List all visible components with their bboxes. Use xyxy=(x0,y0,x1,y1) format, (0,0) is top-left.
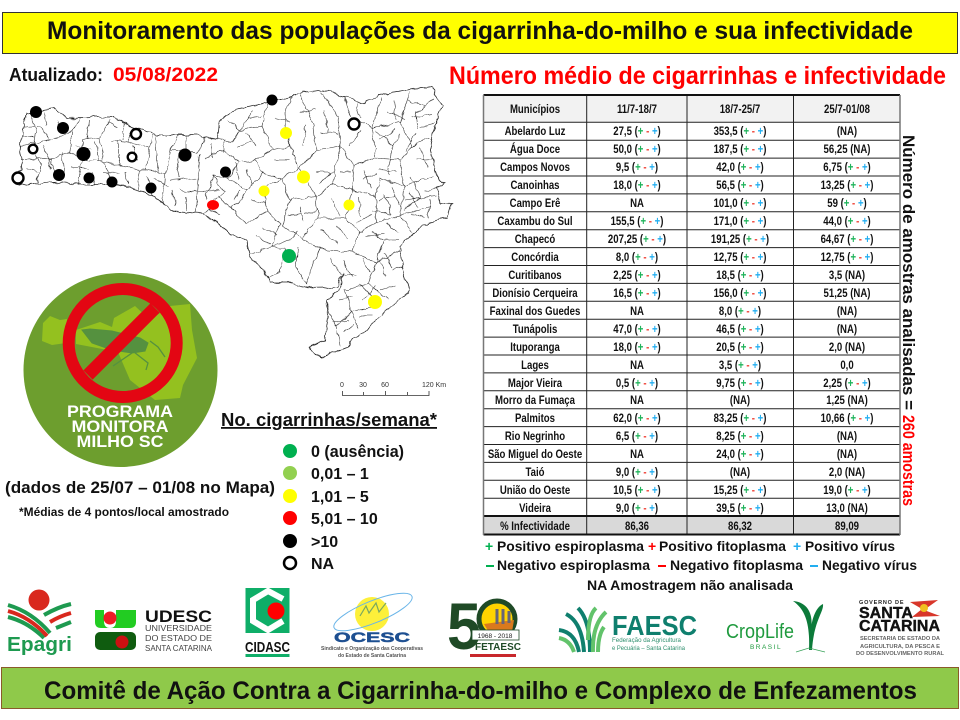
map legend: >10 xyxy=(311,534,338,551)
row xyxy=(500,161,871,174)
row: Campo Erê xyxy=(510,197,560,210)
row xyxy=(510,142,871,156)
row: (NA) xyxy=(837,448,857,461)
row: NA xyxy=(630,197,644,210)
logo: Programa Monitora Milho SC: MONITORA xyxy=(72,418,169,436)
row: NA xyxy=(630,448,644,461)
row: 2,0 (NA) xyxy=(829,341,865,354)
row: 13,25 (+ - +) xyxy=(821,179,874,192)
table symbol legend xyxy=(485,538,917,593)
logo: FETAESC: 1968 - 2018 xyxy=(478,633,513,640)
logo: CIDASC xyxy=(245,588,290,657)
table symbol legend: Negativo vírus xyxy=(822,557,917,573)
logo: CIDASC: CIDASC xyxy=(245,639,290,656)
row: 9,0 (+ - +) xyxy=(616,466,658,479)
logo: Governo de Santa Catarina: CATARINA xyxy=(859,618,940,635)
row: NA xyxy=(630,359,644,372)
row: 24,0 (+ - +) xyxy=(716,448,764,461)
row: 8,0 (+ - +) xyxy=(719,305,761,318)
row xyxy=(515,233,874,246)
row xyxy=(505,125,857,138)
vertical sample count label: Número de amostras analisadas = xyxy=(899,135,917,410)
row: 83,25 (+ - +) xyxy=(714,412,767,425)
row xyxy=(492,287,871,300)
infectivity row: % Infectividade xyxy=(500,520,570,533)
table symbol legend: NA Amostragem não analisada xyxy=(587,577,793,593)
logo: FAESC: FAESC xyxy=(612,610,697,641)
logo: Governo de Santa Catarina: DO DESENVOLVIMENTO RURAL xyxy=(856,651,945,657)
row: 18,0 (+ - +) xyxy=(613,179,661,192)
logo: Governo de Santa Catarina: SECRETARIA DE ESTADO DA xyxy=(860,636,940,642)
footer banner xyxy=(2,668,958,708)
row: São Miguel do Oeste xyxy=(488,448,582,461)
row: (NA) xyxy=(837,125,857,138)
row xyxy=(510,179,874,192)
row: União do Oeste xyxy=(500,484,570,497)
row: 10,66 (+ - +) xyxy=(821,412,874,425)
row: (NA) xyxy=(730,466,750,479)
row: 2,0 (NA) xyxy=(829,466,865,479)
map legend: No. cigarrinhas/semana* xyxy=(221,410,437,430)
row: 191,25 (+ - +) xyxy=(711,233,769,246)
row: 1,25 (NA) xyxy=(826,394,868,407)
row: Campos Novos xyxy=(500,161,570,174)
title banner xyxy=(2,12,958,54)
row: 3,5 (+ - +) xyxy=(719,359,761,372)
infectivity row: 86,32 xyxy=(728,520,752,533)
row xyxy=(519,502,868,515)
scale bar: 60 xyxy=(381,382,389,389)
row: 56,5 (+ - +) xyxy=(716,179,764,192)
row: (NA) xyxy=(730,394,750,407)
row: 187,5 (+ - +) xyxy=(714,143,767,156)
map markers: more than 10 xyxy=(30,94,278,194)
row: (NA) xyxy=(837,430,857,443)
row: Água Doce xyxy=(510,142,560,156)
row: 9,0 (+ - +) xyxy=(616,502,658,515)
table symbol legend: + xyxy=(793,538,801,554)
row: NA xyxy=(630,394,644,407)
infectivity row: 86,36 xyxy=(625,520,649,533)
row: 6,5 (+ - +) xyxy=(616,430,658,443)
map markers: not analysed xyxy=(12,118,360,184)
map marker: 5 to 10 xyxy=(207,200,219,210)
map legend: 1,01 – 5 xyxy=(311,489,369,506)
logo: Governo de Santa Catarina: GOVERNO DE xyxy=(859,600,904,606)
map markers: 1 to 5 xyxy=(258,127,382,309)
row: 18,5 (+ - +) xyxy=(716,269,764,282)
row xyxy=(495,394,868,407)
logo: UDESC: UDESC xyxy=(145,607,212,626)
row: 2,25 (+ - +) xyxy=(823,377,871,390)
row xyxy=(490,305,857,318)
row xyxy=(500,484,871,497)
scale bar: 0 xyxy=(340,382,344,389)
row xyxy=(525,466,865,479)
table header: 25/7-01/08 xyxy=(824,103,870,116)
row: 10,5 (+ - +) xyxy=(613,484,661,497)
row: 64,67 (+ - +) xyxy=(821,233,874,246)
infectivity row xyxy=(500,520,859,533)
logo: Epagri: Epagri xyxy=(7,634,72,656)
table symbol legend: + xyxy=(485,538,493,554)
row xyxy=(521,359,854,372)
row: Dionísio Cerqueira xyxy=(492,287,578,300)
row xyxy=(510,341,865,354)
row: Caxambu do Sul xyxy=(497,215,573,228)
map legend: NA xyxy=(311,556,335,573)
row: Major Vieira xyxy=(508,377,563,390)
logo: FETAESC: 5 xyxy=(447,589,481,663)
table symbol legend: Negativo fitoplasma xyxy=(670,557,803,573)
row: Palmitos xyxy=(515,412,555,425)
row: Concórdia xyxy=(511,251,560,264)
row: 42,0 (+ - +) xyxy=(716,161,764,174)
row: (NA) xyxy=(837,305,857,318)
logo: Programa Monitora Milho SC: PROGRAMA xyxy=(67,403,173,421)
logo: UDESC: DO ESTADO DE xyxy=(145,634,212,643)
insect xyxy=(82,329,165,370)
row: 207,25 (+ - +) xyxy=(608,233,666,246)
logo: CropLife Brasil: BRASIL xyxy=(750,644,782,651)
row: NA xyxy=(630,305,644,318)
row xyxy=(497,215,871,228)
row: 2,25 (+ - +) xyxy=(613,269,661,282)
row: Lages xyxy=(521,359,549,372)
row: 56,25 (NA) xyxy=(824,143,871,156)
row: 171,0 (+ - +) xyxy=(714,215,767,228)
scale bar: 30 xyxy=(359,382,367,389)
row: 353,5 (+ - +) xyxy=(714,125,767,138)
row xyxy=(508,269,865,282)
title banner: Monitoramento das populações da cigarrinha-do-milho e sua infectividade xyxy=(47,17,913,45)
logo: Governo de Santa Catarina xyxy=(856,600,945,657)
logo: Programa Monitora Milho SC: MILHO SC xyxy=(76,433,164,451)
row xyxy=(515,412,874,425)
table header xyxy=(510,103,870,116)
logo: UDESC: SANTA CATARINA xyxy=(145,644,213,653)
row: 9,5 (+ - +) xyxy=(616,161,658,174)
row: 101,0 (+ - +) xyxy=(714,197,767,210)
logo: CropLife Brasil: CropLife xyxy=(726,621,794,643)
map marker: absence xyxy=(282,249,296,263)
row: 20,5 (+ - +) xyxy=(716,341,764,354)
row: 50,0 (+ - +) xyxy=(613,143,661,156)
logo: Programa Monitora Milho SC xyxy=(24,273,218,467)
footer banner: Comitê de Ação Contra a Cigarrinha-do-milho e Complexo de Enfezamentos xyxy=(44,677,917,705)
table symbol legend: Positivo espiroplasma xyxy=(497,538,644,554)
row: 18,0 (+ - +) xyxy=(613,341,661,354)
row: 12,75 (+ - +) xyxy=(821,251,874,264)
logo: FETAESC xyxy=(447,589,521,663)
logo: Governo de Santa Catarina: SANTA xyxy=(859,605,913,622)
row: Canoinhas xyxy=(510,179,560,192)
row: 15,25 (+ - +) xyxy=(714,484,767,497)
scale bar: 120 Km xyxy=(422,382,446,389)
row xyxy=(510,197,867,210)
logo: OCESC: do Estado de Santa Catarina xyxy=(338,653,407,659)
map legend: 0,01 – 1 xyxy=(311,466,369,483)
row: (NA) xyxy=(837,323,857,336)
row: Ituporanga xyxy=(510,341,561,354)
row: 13,0 (NA) xyxy=(826,502,868,515)
logo: CropLife Brasil xyxy=(726,601,825,652)
infectivity row: 89,09 xyxy=(835,520,859,533)
row: 3,5 (NA) xyxy=(829,269,865,282)
row: 0,5 (+ - +) xyxy=(616,377,658,390)
row: 6,75 (+ - +) xyxy=(823,161,871,174)
row: 59 (+ - +) xyxy=(827,197,867,210)
row: 51,25 (NA) xyxy=(824,287,871,300)
logo: OCESC: OCESC xyxy=(334,629,410,645)
row xyxy=(511,251,874,264)
logo: OCESC: Sindicato e Organização das Cooperativas xyxy=(321,646,423,652)
logo: OCESC xyxy=(321,586,423,659)
row: Videira xyxy=(519,502,552,515)
map legend xyxy=(221,410,437,573)
row xyxy=(488,448,857,461)
map of Santa Catarina xyxy=(10,86,453,358)
logo: UDESC xyxy=(95,607,213,653)
row: Taió xyxy=(525,466,545,479)
update date xyxy=(9,65,218,86)
table symbol legend: + xyxy=(648,538,656,554)
row: Rio Negrinho xyxy=(505,430,565,443)
logo: FAESC: e Pecuária – Santa Catarina xyxy=(612,645,685,652)
table symbol legend: Positivo fitoplasma xyxy=(659,538,786,554)
logo: Governo de Santa Catarina: AGRICULTURA, DA PESCA E xyxy=(860,644,940,650)
row: Faxinal dos Guedes xyxy=(490,305,580,318)
row: 16,5 (+ - +) xyxy=(613,287,661,300)
update date: Atualizado: xyxy=(9,65,103,85)
row: 12,75 (+ - +) xyxy=(714,251,767,264)
map legend: 0 (ausência) xyxy=(311,443,404,461)
row xyxy=(505,430,857,443)
row: 19,0 (+ - +) xyxy=(823,484,871,497)
logo: Epagri xyxy=(7,590,72,656)
vertical sample count label: 260 amostras xyxy=(899,415,917,506)
row: 62,0 (+ - +) xyxy=(613,412,661,425)
logo: UDESC: UNIVERSIDADE xyxy=(145,624,212,633)
logo: FAESC: Federação da Agricultura xyxy=(612,637,681,644)
date range note: (dados de 25/07 – 01/08 no Mapa) xyxy=(5,479,275,497)
table symbol legend: Negativo espiroplasma xyxy=(497,557,650,573)
row: Chapecó xyxy=(515,233,556,246)
row xyxy=(508,377,871,390)
table header: 11/7-18/7 xyxy=(617,103,657,116)
row: 155,5 (+ - +) xyxy=(611,215,664,228)
row: Tunápolis xyxy=(513,323,557,336)
row: 8,0 (+ - +) xyxy=(616,251,658,264)
row xyxy=(513,323,857,336)
map legend: 5,01 – 10 xyxy=(311,511,378,528)
table symbol legend: Positivo vírus xyxy=(805,538,895,554)
update date: 05/08/2022 xyxy=(113,65,218,86)
row: 156,0 (+ - +) xyxy=(714,287,767,300)
row: 9,75 (+ - +) xyxy=(716,377,764,390)
row: Morro da Fumaça xyxy=(495,394,576,407)
scale bar xyxy=(340,382,446,396)
table header: 18/7-25/7 xyxy=(720,103,760,116)
row: Abelardo Luz xyxy=(505,125,566,138)
data table xyxy=(484,95,900,535)
row: 47,0 (+ - +) xyxy=(613,323,661,336)
row: 44,0 (+ - +) xyxy=(823,215,871,228)
state outline xyxy=(12,86,453,358)
row: 0,0 xyxy=(840,359,854,372)
row: 27,5 (+ - +) xyxy=(613,125,661,138)
row: 8,25 (+ - +) xyxy=(716,430,764,443)
row: Curitibanos xyxy=(508,269,562,282)
sampling note: *Médias de 4 pontos/local amostrado xyxy=(19,505,229,519)
table header: Municípios xyxy=(510,103,560,116)
logo: FETAESC: FETAESC xyxy=(475,642,521,653)
row: 39,5 (+ - +) xyxy=(716,502,764,515)
logo: FAESC xyxy=(559,608,697,652)
row: 46,5 (+ - +) xyxy=(716,323,764,336)
